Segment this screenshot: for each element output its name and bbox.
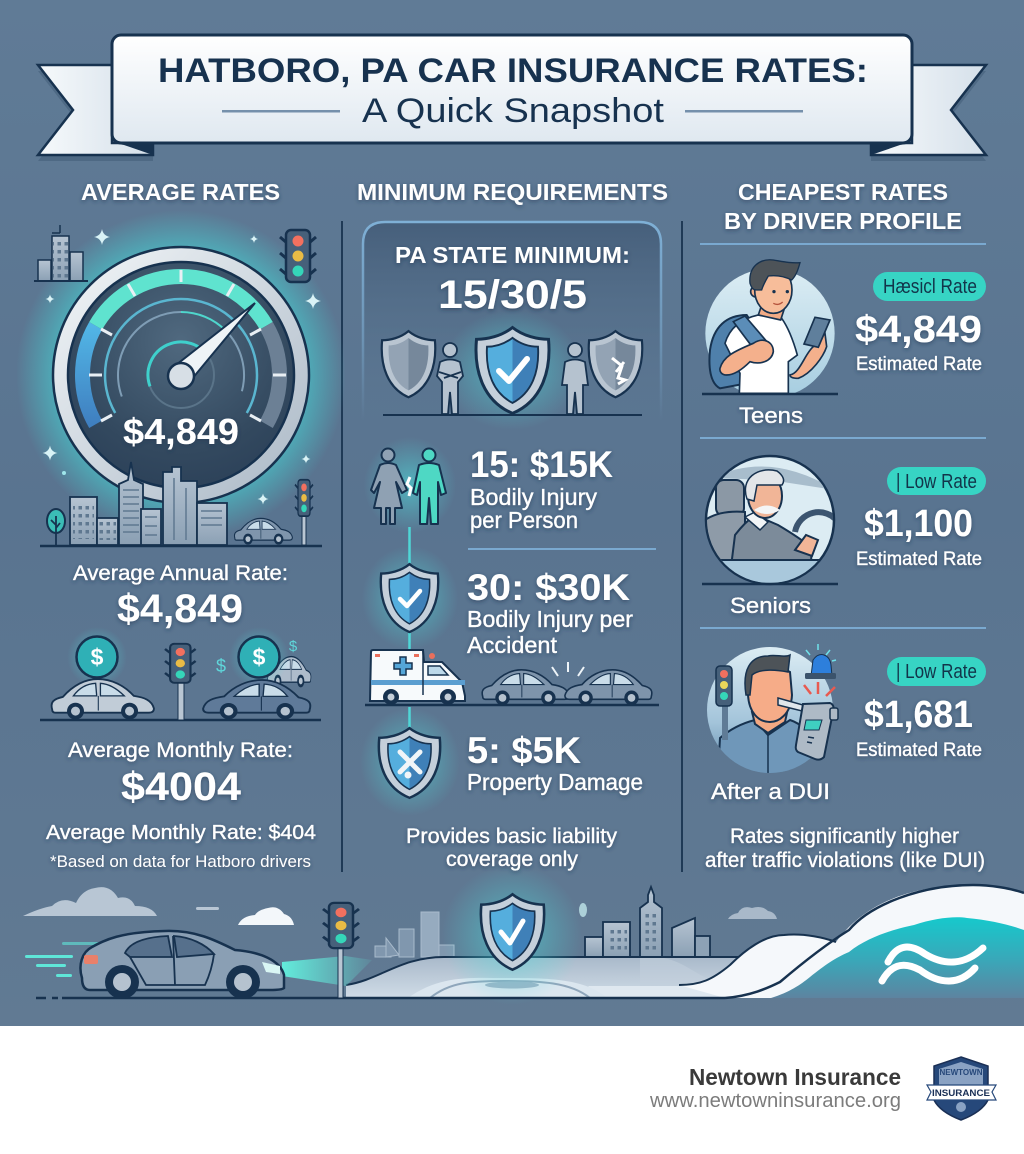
icon: person standing xyxy=(562,343,588,414)
speed lines xyxy=(25,942,114,977)
column heading: cheapest rates: BY DRIVER PROFILE xyxy=(724,208,962,234)
text: property damage: Property Damage xyxy=(467,769,643,795)
road hill xyxy=(346,957,760,998)
sparkles xyxy=(42,229,321,504)
icon: car xyxy=(234,518,292,545)
pill: low rate xyxy=(887,467,986,495)
icon: crashed cars xyxy=(482,662,652,705)
text: PA state minimum: PA STATE MINIMUM: xyxy=(395,242,630,268)
icon: back car xyxy=(267,657,311,687)
illustration: cars with dollar coins xyxy=(40,627,321,720)
illustration: cars with dollar coins: $ xyxy=(216,656,226,676)
text: footnote: *Based on data for Hatboro drivers xyxy=(50,852,311,871)
text: bodily injury per person: Bodily Injury xyxy=(470,484,598,510)
panel: PA state minimum xyxy=(363,222,661,430)
icon: tree xyxy=(47,509,65,545)
pill: rate tag xyxy=(873,272,986,301)
column heading: minimum requirements: MINIMUM REQUIREMENTS xyxy=(357,179,668,205)
text: liability note xyxy=(406,825,618,871)
label: average annual rate: Average Annual Rate: xyxy=(73,562,288,585)
icon: ambulance xyxy=(370,650,465,705)
label: after a DUI: After a DUI xyxy=(711,779,830,804)
subtitle: A Quick Snapshot xyxy=(362,92,665,130)
icon: blue check shield xyxy=(476,327,549,413)
text: bodily injury per accident: Accident xyxy=(467,632,558,658)
logo: Newtown Insurance badge: INSURANCE xyxy=(932,1088,990,1099)
illustration: ambulance and crash xyxy=(365,650,659,705)
title text: HATBORO, PA CAR INSURANCE RATES: xyxy=(158,52,868,90)
value: DUI rate: $1,681 xyxy=(864,694,973,736)
pill: low rate: | Low Rate xyxy=(896,661,977,683)
value: monthly rate: $4004 xyxy=(121,765,242,809)
text: 30: 30: $30K xyxy=(467,567,630,608)
label: seniors: Seniors xyxy=(730,593,811,618)
pill: low rate xyxy=(887,657,986,686)
icon: dollar coin left: $ xyxy=(91,644,104,670)
text: liability note: Provides basic liability xyxy=(406,825,618,848)
footer website: www.newtowninsurance.org xyxy=(649,1090,901,1112)
wave xyxy=(679,885,1024,998)
column heading: average rates: AVERAGE RATES xyxy=(81,179,280,205)
profile: after a DUI xyxy=(707,644,986,804)
illustration: senior driver xyxy=(705,456,838,584)
icon: traffic light top xyxy=(280,230,316,282)
value: senior rate: $1,100 xyxy=(864,503,973,545)
icon: silver car xyxy=(52,679,154,720)
value: annual rate: $4,849 xyxy=(117,587,243,631)
profile: seniors xyxy=(702,456,986,618)
value: 15/30/5: 15/30/5 xyxy=(438,273,587,317)
logo: Newtown Insurance badge xyxy=(927,1057,996,1120)
text: violations note xyxy=(705,825,985,872)
bottom scene xyxy=(23,865,1024,1005)
text: violations note: Rates significantly higher xyxy=(730,825,959,848)
needle xyxy=(168,303,255,389)
text: liability note: coverage only xyxy=(446,848,579,871)
icon: person arms crossed xyxy=(437,343,463,414)
headlight beam xyxy=(282,956,372,986)
speedometer gauge xyxy=(16,210,346,540)
icon: traffic light xyxy=(165,644,196,720)
value: teen rate: $4,849 xyxy=(855,309,982,351)
icon: tools shield xyxy=(360,708,460,816)
icon: traffic light xyxy=(323,903,359,998)
text: estimated rate: Estimated Rate xyxy=(856,740,982,761)
text: 15: 15: $15K xyxy=(470,444,613,485)
footer brand name: Newtown Insurance xyxy=(689,1064,901,1090)
pill: low rate: | Low Rate xyxy=(896,471,977,493)
icon: tools shield xyxy=(589,331,642,397)
column heading: cheapest rates: CHEAPEST RATES xyxy=(738,179,948,205)
label: teens: Teens xyxy=(739,403,803,428)
text: violations note: after traffic violations (like DUI) xyxy=(705,849,985,872)
text: 5: 5: $5K xyxy=(467,730,581,771)
icon: shield xyxy=(442,865,582,1005)
text: bodily injury per accident: Bodily Injury per xyxy=(467,606,633,632)
icon: distant buildings xyxy=(375,912,454,957)
gauge value: $4,849 xyxy=(123,411,239,452)
icon: police light xyxy=(804,644,836,696)
icon: dollar coin right xyxy=(238,636,280,678)
icon: two people xyxy=(364,437,456,533)
icon: check shield xyxy=(362,546,458,650)
icon: small city top left xyxy=(34,225,88,281)
icon: city skyline xyxy=(40,462,322,546)
logo: Newtown Insurance badge: NEWTOWN xyxy=(940,1068,983,1077)
illustration: DUI xyxy=(707,644,838,775)
icon: traffic light lower xyxy=(295,480,313,545)
icon: blue car xyxy=(203,680,310,719)
icon: grey shield xyxy=(382,331,435,397)
icon: dollar coin right: $ xyxy=(253,644,266,670)
icon: main car xyxy=(80,931,284,999)
column heading: cheapest rates xyxy=(724,179,962,234)
illustration: teen xyxy=(705,260,835,398)
text: bodily injury per person: per Person xyxy=(470,507,578,533)
title banner xyxy=(38,35,986,161)
pill: rate tag: Hæsicl Rate xyxy=(883,276,977,298)
text: estimated rate: Estimated Rate xyxy=(856,549,982,570)
text: bodily injury per accident xyxy=(467,606,633,658)
icon: dollar coin left xyxy=(76,636,118,678)
footer xyxy=(0,1026,1024,1154)
icon: clouds xyxy=(23,887,777,925)
text: estimated rate: Estimated Rate xyxy=(856,354,982,375)
label: average monthly rate: Average Monthly Rate: xyxy=(68,739,293,762)
text: bodily injury per person xyxy=(470,484,598,533)
illustration: cars with dollar coins: $ xyxy=(289,638,298,655)
profile: teens xyxy=(702,260,986,428)
text: monthly rate line: Average Monthly Rate: $404 xyxy=(46,822,316,844)
